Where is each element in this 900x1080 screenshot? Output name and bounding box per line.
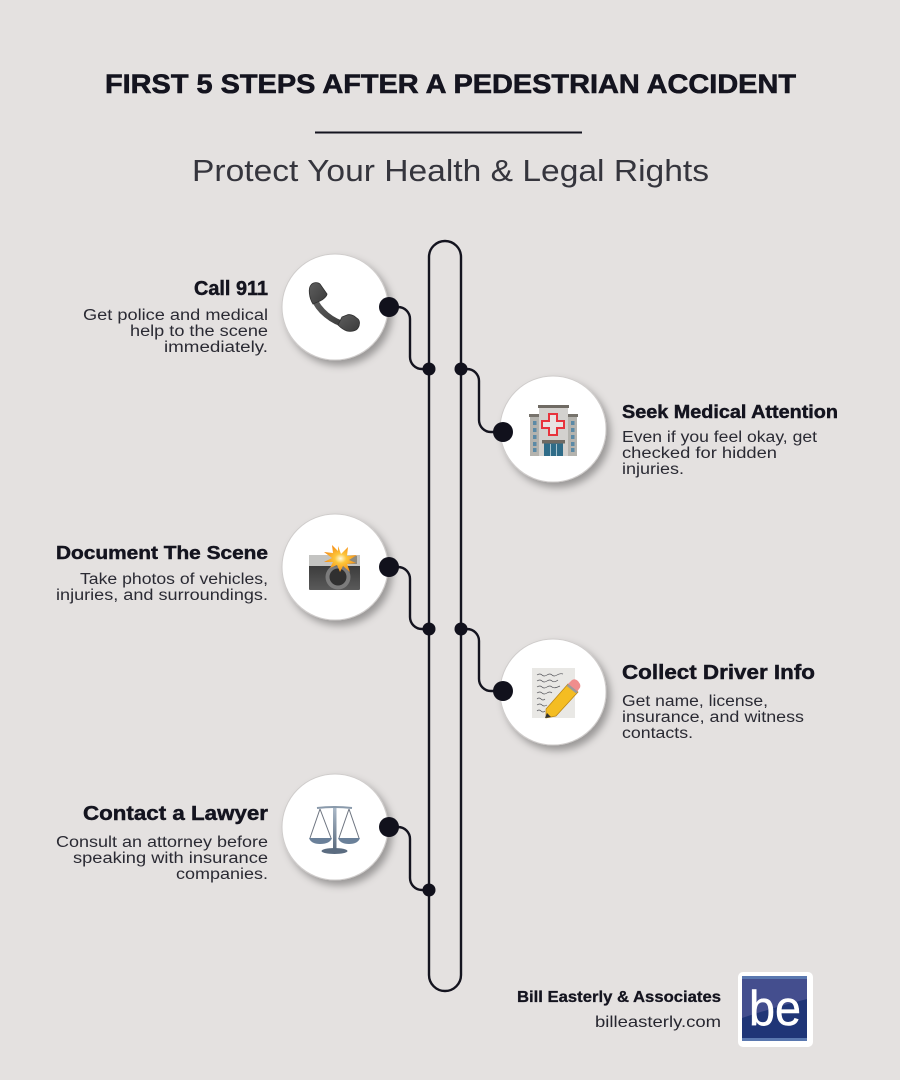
footer company name: Bill Easterly & Associates <box>517 989 721 1006</box>
connector: Seek Medical Attention <box>461 369 503 432</box>
step 2 description: checked for hidden <box>622 445 777 462</box>
step 5 description: companies. <box>176 866 268 883</box>
icon: balance scale <box>309 806 360 854</box>
step 2 description: injuries. <box>622 461 684 478</box>
logo: be <box>749 982 801 1036</box>
step 2 badge <box>500 376 606 482</box>
connector: Contact a Lawyer <box>389 827 429 890</box>
timeline track <box>429 241 461 991</box>
step 4 description <box>622 693 804 742</box>
step 4 description: contacts. <box>622 725 693 742</box>
step 3 badge <box>282 514 388 620</box>
logo <box>738 972 813 1047</box>
step 5 badge <box>282 774 388 880</box>
subtitle: Protect Your Health & Legal Rights <box>192 153 709 188</box>
icon: telephone <box>309 283 360 331</box>
step 4 badge <box>500 639 606 745</box>
step: Contact a Lawyer <box>56 774 388 883</box>
title: FIRST 5 STEPS AFTER A PEDESTRIAN ACCIDENT <box>105 69 797 99</box>
step 3 heading: Document The Scene <box>56 543 268 563</box>
step 4 heading: Collect Driver Info <box>622 662 815 684</box>
step 1 badge <box>282 254 388 360</box>
step 1 description <box>83 307 268 356</box>
step 1 heading: Call 911 <box>194 278 268 300</box>
step: Call 911 <box>83 254 388 360</box>
connector end dots <box>379 297 513 896</box>
title divider <box>315 132 582 134</box>
step 3 description <box>56 571 268 604</box>
step: Collect Driver Info <box>500 639 815 745</box>
icon: hospital <box>529 405 578 456</box>
step 5 description <box>56 834 268 883</box>
step 2 description <box>622 429 818 478</box>
step 2 heading: Seek Medical Attention <box>622 402 838 422</box>
icon: camera with flash <box>309 545 360 590</box>
step: Seek Medical Attention <box>500 376 838 482</box>
connector: Collect Driver Info <box>461 629 503 691</box>
step 3 description: Take photos of vehicles, <box>80 571 268 588</box>
step: Document The Scene <box>56 514 388 620</box>
step 1 description: Get police and medical <box>83 307 268 324</box>
connector: Call 911 <box>389 307 429 369</box>
step 3 description: injuries, and surroundings. <box>56 587 268 604</box>
step 5 heading: Contact a Lawyer <box>83 803 268 825</box>
step 1 description: immediately. <box>164 339 268 356</box>
step 1 description: help to the scene <box>130 323 268 340</box>
step 4 description: Get name, license, <box>622 693 768 710</box>
footer website: billeasterly.com <box>595 1014 721 1031</box>
step 5 description: speaking with insurance <box>73 850 268 867</box>
step 5 description: Consult an attorney before <box>56 834 268 851</box>
step 4 description: insurance, and witness <box>622 709 804 726</box>
icon: memo and pencil <box>532 668 580 718</box>
step 2 description: Even if you feel okay, get <box>622 429 818 446</box>
connector: Document The Scene <box>389 567 429 629</box>
